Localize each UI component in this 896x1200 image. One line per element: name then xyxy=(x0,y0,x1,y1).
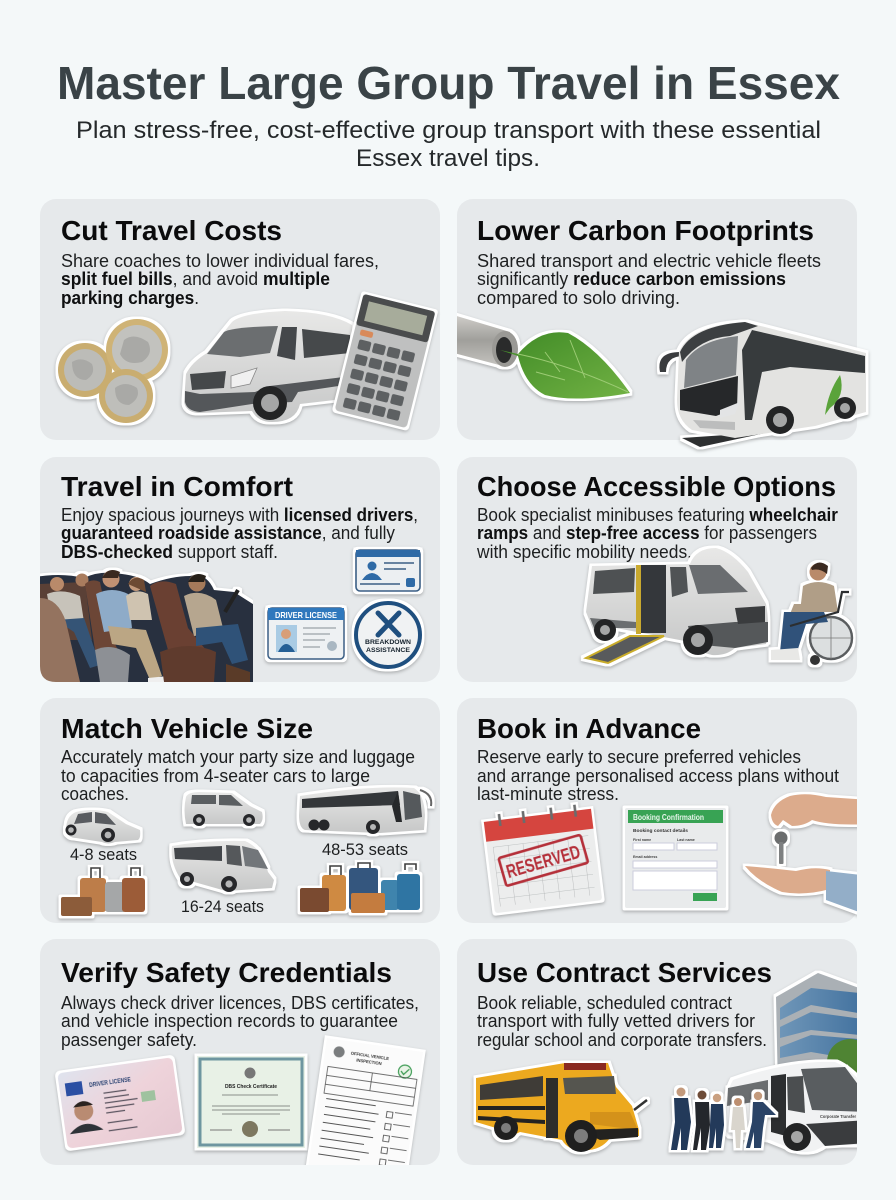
icon: large coach xyxy=(299,787,431,834)
heading: Lower Carbon Footprints xyxy=(477,215,814,246)
body text xyxy=(477,250,821,308)
body text xyxy=(477,992,767,1050)
icon: vehicle inspection checklist xyxy=(304,1035,427,1165)
heading: Travel in Comfort xyxy=(61,471,293,502)
icon: person in wheelchair xyxy=(771,562,852,665)
heading: Book in Advance xyxy=(477,713,701,744)
icon: driver licence card: DRIVER LICENSE xyxy=(89,1076,132,1089)
body text: split fuel bills, and avoid multiple xyxy=(61,268,330,289)
icon: coach with road shadow xyxy=(659,322,866,447)
icon: white minibus xyxy=(725,1062,868,1152)
heading: Choose Accessible Options xyxy=(477,471,836,502)
body text: with specific mobility needs. xyxy=(476,541,692,562)
panel: cut travel costs xyxy=(40,199,440,440)
body text xyxy=(61,504,418,562)
panel background xyxy=(457,457,857,682)
panel background xyxy=(40,199,440,440)
heading: Match Vehicle Size xyxy=(61,713,313,744)
heading: Verify Safety Credentials xyxy=(61,957,392,988)
icon: breakdown assistance badge xyxy=(356,603,420,667)
icon: reserved calendar: RESERVED xyxy=(504,842,583,883)
panel background xyxy=(457,939,857,1165)
panel: book in advance xyxy=(457,698,870,923)
label: 16-24 seats xyxy=(181,897,264,916)
panel: lower carbon footprints xyxy=(450,199,866,447)
panel: travel in comfort xyxy=(30,457,440,690)
body text: Shared transport and electric vehicle fleets xyxy=(477,250,821,271)
icon: office building and tree xyxy=(772,970,857,1073)
icon: booking confirmation form: Last name xyxy=(677,838,695,842)
body text: Always check driver licences, DBS certificates, xyxy=(61,992,419,1013)
panel background xyxy=(40,698,440,923)
body text: Reserve early to secure preferred vehicles xyxy=(477,746,801,767)
icon: booking confirmation form: First name xyxy=(633,838,651,842)
body text: and vehicle inspection records to guarantee xyxy=(61,1010,398,1031)
body text xyxy=(476,504,838,562)
body text: and arrange personalised access plans without xyxy=(477,765,839,786)
icon: DBS certificate xyxy=(197,1056,305,1148)
body text: DBS-checked support staff. xyxy=(61,541,278,562)
heading: Use Contract Services xyxy=(477,957,772,988)
body text: coaches. xyxy=(61,783,129,804)
body text: compared to solo driving. xyxy=(477,287,680,308)
icon: driver license card xyxy=(268,608,344,659)
subtitle: Essex travel tips. xyxy=(356,145,540,172)
icon: exhaust pipe with leaf xyxy=(450,314,630,399)
label: 48-53 seats xyxy=(322,840,408,859)
body text: transport with fully vetted drivers for xyxy=(477,1010,755,1031)
body text: guaranteed roadside assistance, and fully xyxy=(61,522,396,543)
icon: yellow school bus xyxy=(476,1063,647,1152)
icon: booking confirmation form: Booking Confirmation xyxy=(633,813,704,822)
icon: silver minibus xyxy=(184,311,352,422)
body text: Accurately match your party size and luggage xyxy=(61,746,415,767)
icon: booking confirmation form: Email address xyxy=(633,855,657,859)
panel: use contract services xyxy=(457,939,873,1165)
panel background xyxy=(40,939,440,1165)
icon: reserved calendar xyxy=(483,803,602,913)
panel background xyxy=(457,199,857,440)
body text: to capacities from 4-seater cars to large xyxy=(61,765,370,786)
icon: driver license card: DRIVER LICENSE xyxy=(275,610,337,620)
icon: breakdown assistance badge: ASSISTANCE xyxy=(366,647,411,654)
icon: booking confirmation form: Booking contact details xyxy=(633,828,688,833)
icon: breakdown assistance badge: BREAKDOWN xyxy=(365,639,411,646)
body text: ramps and step-free access for passengers xyxy=(477,522,817,543)
icon: driver licence card xyxy=(57,1057,183,1149)
heading: Cut Travel Costs xyxy=(61,215,282,246)
icon: vehicle inspection checklist: OFFICIAL VEHICLE xyxy=(350,1051,390,1061)
body text: last-minute stress. xyxy=(477,783,619,804)
icon: small luggage set xyxy=(61,868,145,916)
panel background xyxy=(40,457,440,682)
icon: pound coins xyxy=(58,319,168,423)
body text xyxy=(477,746,839,804)
body text: parking charges. xyxy=(61,287,199,308)
icon: vehicle inspection checklist: INSPECTION xyxy=(356,1057,382,1066)
photo: passengers seated in a coach xyxy=(30,570,256,690)
body text xyxy=(61,250,379,308)
subtitle: Plan stress-free, cost-effective group transport with these essential xyxy=(76,117,821,144)
panel background xyxy=(457,698,857,923)
panel: match vehicle size xyxy=(40,698,440,923)
icon: DBS certificate: DBS Check Certificate xyxy=(225,1084,277,1090)
label: 4-8 seats xyxy=(70,845,137,864)
subtitle xyxy=(76,117,821,172)
body text: Share coaches to lower individual fares, xyxy=(61,250,379,271)
icon: midi coach xyxy=(172,841,274,892)
body text: significantly reduce carbon emissions xyxy=(477,268,786,289)
body text: Book specialist minibuses featuring wheelchair xyxy=(477,504,838,525)
body text: Enjoy spacious journeys with licensed drivers, xyxy=(61,504,418,525)
body text xyxy=(61,992,419,1050)
icon: small car xyxy=(66,810,140,844)
icon: MPV xyxy=(184,792,263,826)
title: Master Large Group Travel in Essex xyxy=(57,57,840,109)
panel: verify safety credentials xyxy=(40,939,440,1165)
icon: hands exchanging a key xyxy=(745,794,870,916)
icon: calculator xyxy=(335,294,435,428)
body text: regular school and corporate transfers. xyxy=(477,1029,767,1050)
body text xyxy=(61,746,415,804)
icon: group of commuters xyxy=(671,1088,776,1150)
icon: accessible van with ramp xyxy=(586,548,768,663)
icon: large luggage set xyxy=(300,863,420,913)
panel: choose accessible options xyxy=(457,457,857,682)
icon: white minibus: Corporate Transfer xyxy=(820,1114,856,1119)
body text: passenger safety. xyxy=(61,1029,197,1050)
body text: Book reliable, scheduled contract xyxy=(477,992,732,1013)
icon: ID card xyxy=(356,550,420,591)
icon: booking confirmation form xyxy=(625,808,726,908)
